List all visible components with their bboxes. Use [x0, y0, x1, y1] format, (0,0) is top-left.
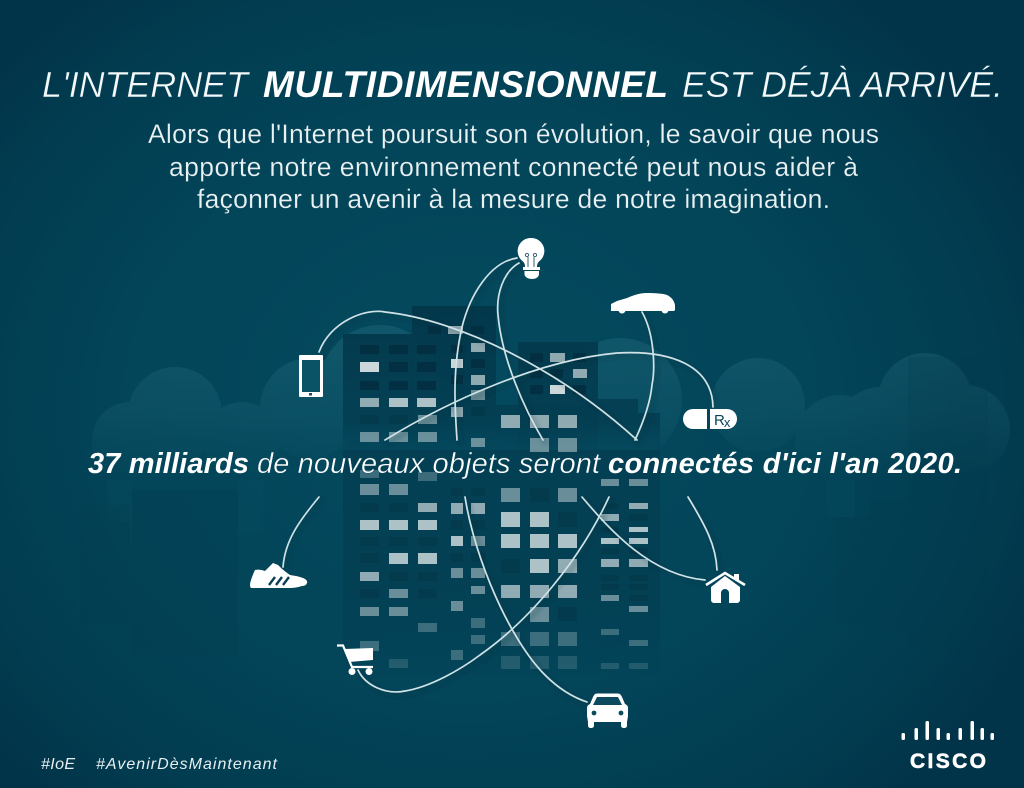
icon: light bulb — [518, 238, 544, 279]
intro text: façonner un avenir à la mesure de notre imagination. — [197, 184, 830, 214]
intro text: apporte notre environnement connecté peut nous aider à — [169, 152, 858, 182]
hashtags: #AvenirDèsMaintenant — [96, 756, 278, 773]
Cisco logo: CISCO — [910, 750, 986, 773]
hashtags: #IoE — [41, 756, 75, 773]
lit windows — [360, 326, 648, 669]
connecting curves — [283, 258, 717, 702]
title: EST DÉJÀ ARRIVÉ. — [682, 64, 1003, 105]
intro text: Alors que l'Internet poursuit son évolution, le savoir que nous — [148, 119, 879, 149]
icon: sedan car — [611, 293, 675, 314]
intro text — [148, 119, 879, 214]
icon: prescription pill: x — [724, 415, 731, 430]
title — [42, 64, 1003, 105]
title: L'INTERNET — [42, 64, 251, 105]
headline statistic: de nouveaux objets seront — [257, 448, 602, 480]
icon: prescription pill — [683, 409, 737, 430]
icon: shopping cart — [337, 646, 373, 675]
background clouds — [102, 325, 1009, 424]
icon: prescription pill: R — [714, 412, 725, 429]
icon: sneaker — [250, 563, 307, 588]
headline statistic — [88, 448, 962, 480]
headline statistic: connectés d'ici l'an 2020. — [608, 448, 962, 480]
icon: house — [706, 573, 745, 603]
building skyline: lower reflection — [343, 450, 660, 675]
cloud bases — [107, 480, 855, 533]
faint background skyline — [80, 357, 988, 655]
icon: car front view — [587, 694, 628, 728]
building skyline: upper part — [343, 306, 660, 460]
icon: smartphone — [299, 355, 323, 397]
headline statistic: 37 milliards — [88, 448, 249, 480]
title: MULTIDIMENSIONNEL — [263, 64, 668, 105]
unlit windows — [360, 326, 586, 394]
Cisco logo — [902, 721, 994, 773]
